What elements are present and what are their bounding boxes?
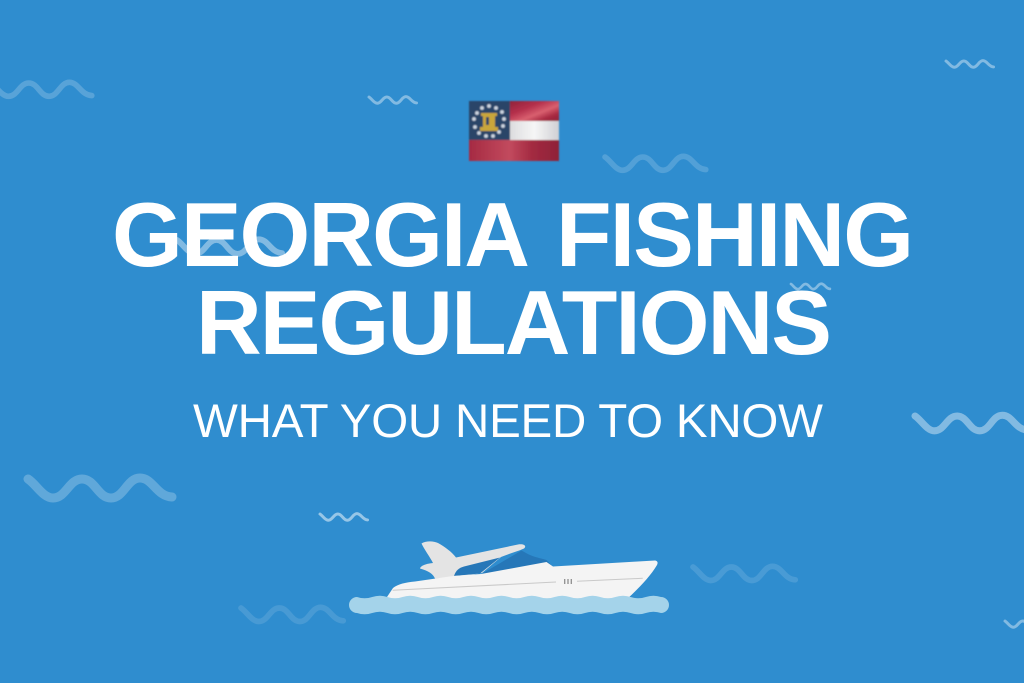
decorative wave: top left bbox=[0, 82, 92, 96]
subtitle: WHAT YOU NEED TO KNOW bbox=[193, 395, 823, 448]
decorative wave: bottom left bbox=[241, 607, 343, 621]
water band bbox=[349, 596, 669, 614]
decorative wave: right bbox=[915, 415, 1024, 431]
decorative wave: above title bbox=[605, 156, 706, 170]
decorative wave: behind title right bbox=[791, 284, 830, 289]
decorative wave: top right bbox=[946, 61, 994, 67]
decorative wave: behind title left bbox=[177, 239, 282, 254]
title bbox=[112, 185, 914, 374]
decorative wave: bottom right bbox=[1005, 621, 1024, 627]
title: FISHING bbox=[556, 185, 914, 286]
boat windshield bbox=[482, 550, 553, 574]
boat hull bbox=[385, 560, 658, 600]
boat hull stripe bbox=[393, 578, 643, 590]
title: REGULATIONS bbox=[196, 273, 832, 374]
decorative wave: small lower left bbox=[320, 514, 368, 520]
icon: Georgia state flag bbox=[469, 101, 559, 161]
boat radar arch and fin bbox=[420, 541, 525, 578]
decorative wave: bottom centre right bbox=[693, 566, 795, 580]
decorative wave: top centre bbox=[369, 97, 417, 103]
boat side window bbox=[454, 558, 500, 576]
boat vents bbox=[565, 579, 571, 584]
icon: white motor boat on water bbox=[349, 541, 669, 614]
decorative wave: lower left bbox=[28, 478, 172, 498]
title: GEORGIA bbox=[112, 185, 530, 286]
